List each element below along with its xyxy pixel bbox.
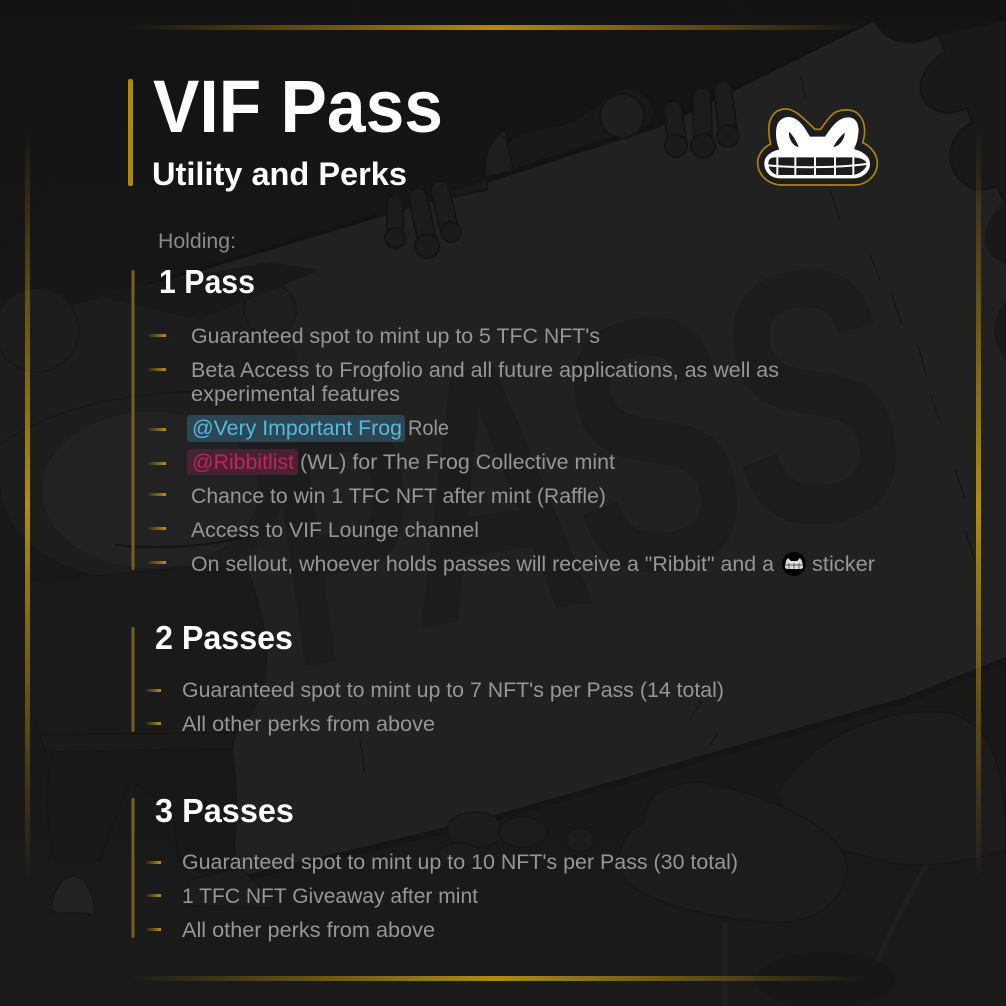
background: sign scratches — [360, 75, 975, 840]
background: wooden sign — [120, 20, 1006, 880]
frame: left gold line — [25, 130, 30, 880]
background: lily pads and mushrooms — [438, 712, 1006, 1006]
bullet: 14 total: Guaranteed spot to mint up to 7 NFT's per Pass (14 total) — [182, 679, 724, 702]
background: faint PASS lettering: P — [246, 325, 444, 743]
background: faint PASS lettering: S — [539, 234, 767, 656]
heading: 3 Passes: 3 Passes — [155, 792, 294, 829]
bullet: lounge: Access to VIF Lounge channel — [191, 519, 479, 542]
icon: frog logo badge — [758, 109, 877, 185]
panel: 3 Passes perks — [132, 792, 738, 942]
heading: 1 Pass: 1 Pass — [159, 263, 255, 300]
bullet: very important frog role: Role — [408, 417, 449, 440]
bullet: beta access: experimental features — [191, 383, 400, 406]
bullet: guaranteed mint: Guaranteed spot to mint up to 5 TFC NFT's — [191, 325, 600, 348]
bullet: raffle: Chance to win 1 TFC NFT after mint (Raffle) — [191, 485, 606, 508]
bullet: giveaway: 1 TFC NFT Giveaway after mint — [182, 885, 478, 908]
background: faint PASS lettering: A — [369, 280, 611, 704]
holding label: Holding: — [158, 230, 236, 253]
bullet: beta access: Beta Access to Frogfolio and all future applications, as well as — [191, 359, 779, 382]
icon: sticker — [782, 552, 806, 576]
frame: right gold line — [976, 130, 981, 880]
bullet: sellout sticker: sticker — [812, 553, 875, 576]
section accent bar — [132, 627, 134, 732]
section accent bar — [132, 798, 134, 938]
header accent bar — [128, 79, 133, 186]
background: frog head — [0, 290, 302, 580]
background: scalloped sign edge — [921, 20, 1006, 205]
panel: 2 Passes perks — [132, 619, 724, 736]
subtitle: Utility and Perks — [152, 156, 407, 192]
bullet: ribbitlist — [148, 449, 615, 475]
header block — [128, 65, 443, 192]
bullet: very important frog role: @Very Important Frog — [192, 417, 402, 440]
background: peeking eyes and hands — [385, 88, 739, 258]
background: faint PASS lettering — [246, 186, 926, 743]
bullet: ribbitlist: (WL) for The Frog Collective mint — [300, 451, 615, 474]
bullet: very important frog role — [148, 415, 449, 442]
background: faint PASS lettering: S — [698, 186, 926, 608]
background: frog hoodie and legs — [23, 562, 266, 750]
section accent bar — [132, 270, 134, 570]
title: VIF Pass — [153, 65, 443, 148]
bullet: 30 total: Guaranteed spot to mint up to 10 NFT's per Pass (30 total) — [182, 851, 738, 874]
bullet: sellout sticker: On sellout, whoever holds passes will receive a "Ribbit" and a — [191, 553, 774, 576]
bullet: other perks: All other perks from above — [182, 713, 435, 736]
background: frog shoes — [52, 876, 95, 914]
heading: 2 Passes: 2 Passes — [155, 619, 293, 656]
frame: top gold line — [128, 25, 863, 30]
bullet: ribbitlist: @Ribbitlist — [192, 451, 294, 474]
panel: 1 Pass perks — [132, 263, 875, 576]
frame: bottom gold line — [128, 976, 863, 981]
bullet: other perks: All other perks from above — [182, 919, 435, 942]
bullet: beta access — [148, 359, 779, 406]
